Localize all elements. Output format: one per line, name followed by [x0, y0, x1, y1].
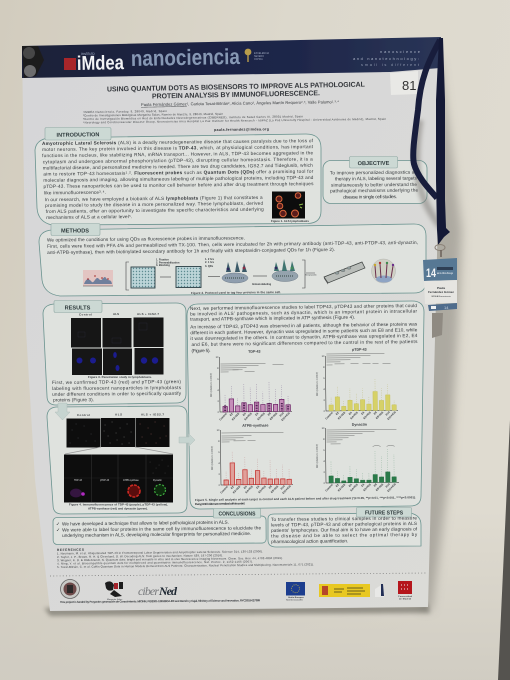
logo: imdea wordmark: iMdea [77, 52, 125, 75]
chart: Dynactin: E6 [360, 482, 366, 488]
objective text [330, 170, 421, 200]
chart: ATPB-synthase: 6 [218, 451, 220, 454]
lower micrograph block: ATPB-synthase [123, 479, 140, 482]
top micrographs [66, 418, 170, 448]
chart: ATPB-synthase: E6+IGS [257, 484, 267, 494]
results text 2: be involved in ALS' pathogenesis, such as dynactin, which is an important protein in intracellular [190, 309, 418, 316]
chart: ATPB-synthase: MFI (relative to control) [211, 446, 214, 470]
heading: results: RESULTS [65, 306, 91, 312]
affiliations: ²Centro de Investigaciones Biológicas Margarita Salas, Ramiro de Maeztu, 9, 28040, Madrid, Spain [83, 112, 223, 117]
chart: ATPB-synthase [210, 423, 293, 496]
chart: Dynactin: 6 [323, 449, 325, 452]
banner tagline [353, 49, 421, 67]
introduction text: multifactorial disease, and personalized medicine is needed. There are two drug candidates, IGS2.7 and Tideglusib, which [43, 163, 313, 170]
introduction text: like immunofluorescence³˒⁴. [44, 190, 106, 195]
chart: pTDP-43: 6 [323, 377, 325, 380]
chart: Dynactin: 8 [323, 438, 325, 441]
logo: Comunidad de Madrid: Comunidad [398, 596, 413, 598]
panel: results left bottom [47, 406, 187, 514]
name badge: workshop [436, 271, 453, 275]
column labels: Control [79, 312, 92, 316]
email: paula.fernandez@imdea.org [214, 127, 269, 132]
banner tagline: nanoscience [380, 49, 421, 54]
chart: ATPB-synthase: E8+IGS [270, 484, 279, 494]
name badge: 14 [444, 305, 449, 310]
caption figure 4: Figure 4. Immunofluorescence of TDP-43 (purple), pTDP-43 (yellow), [69, 502, 168, 506]
panel: introduction [35, 128, 321, 225]
logo: EU flag: NextGenerationEU [286, 598, 303, 602]
logo: ciberNed [138, 584, 178, 598]
conclusions text: underlying mechanism in ALS, developing molecular fingerprints for personalized medicine. [62, 531, 251, 538]
conclusions text: ✓ [56, 527, 60, 533]
logo: ciberNed: Ned [158, 584, 178, 598]
chart: ATPB-synthase: E4+IGS [244, 484, 254, 494]
chart: pTDP-43: pTDP-43 [352, 348, 367, 352]
heading: introduction [45, 128, 111, 140]
chart: ATPB-synthase: E10 [280, 484, 286, 490]
heading: introduction: INTRODUCTION [57, 132, 99, 139]
number card 81: 81 [402, 78, 416, 93]
step list 2: 3. QDs [205, 264, 214, 268]
arrow: down between result panels [55, 403, 70, 420]
step list 2: 1. 2 hrs [205, 257, 215, 261]
references: 1. Neumann, M. et al. Ubiquitinated TDP-43 in Frontotemporal Lobar Degeneration and Amyotrophic Lateral Sclerosis. Science 314, 130-133 (2006). [57, 549, 263, 555]
lanyard shadow [417, 120, 443, 338]
figure 1: ALS lymphoblasts: Figure 1. ALS lymphoblasts [271, 219, 309, 223]
arrow with label: Immunolabeling [252, 283, 272, 286]
chart: Dynactin: E10 [385, 482, 391, 488]
arrow with label [252, 276, 272, 286]
introduction text: promising model to study the disease in a more personalized way. These lymphoblasts, derived [45, 201, 264, 208]
slide with antibodies 1 [222, 261, 248, 283]
step list 2: 2. 1 hrs [205, 260, 215, 264]
chart: TDP-43: E4 [242, 411, 247, 417]
chart: ATPB-synthase: E6 [255, 484, 261, 490]
chart: ATPB-synthase: E8 [268, 484, 273, 490]
lanyard [413, 38, 450, 245]
chart: TDP-43: E10+IGS [280, 411, 291, 422]
figure 4: immunofluorescence [64, 412, 173, 510]
affiliations: ¹IMDEA Nanociencia, Faraday, 9, 28049, Madrid, Spain [83, 109, 167, 114]
arrow [160, 276, 171, 278]
introduction text: motor neurons. The key protein involved in this disease is TDP-43, which, at physiological conditions, has important [42, 144, 314, 152]
column labels: ALS + IGS2.7 [141, 412, 164, 416]
chart: ATPB-synthase: 4 [218, 462, 220, 465]
lower micrograph block [64, 454, 173, 502]
chart: Dynactin: 4 [323, 460, 325, 463]
arrow [208, 276, 220, 278]
chart: pTDP-43: E8 [373, 410, 378, 416]
panel: conclusions [53, 508, 266, 544]
chart: pTDP-43: E10 [385, 410, 391, 416]
conclusions text [56, 519, 262, 538]
results text 1 [52, 379, 182, 402]
chart: TDP-43: E4+IGS [243, 411, 253, 421]
chart: ATPB-synthase: E2+IGS [232, 485, 241, 494]
chart: TDP-43: 10 [216, 356, 219, 359]
chart: TDP-43: E10 [279, 411, 285, 417]
affiliations [83, 106, 387, 124]
future steps text: the disease and be able to select the optimal therapy by [271, 532, 418, 538]
references: 3. Wegner, K. D. & Hildebrandt, N. Quantum dots: bright and versatile in vitro and in vivo fluorescence imaging biosensors. Chem. Soc. Rev. 44, 4792-4834 (2015). [57, 556, 283, 562]
chart: ATPB-synthase: 8 [218, 440, 220, 443]
references: REFERENCES [57, 548, 84, 552]
logo row [60, 580, 413, 602]
chart: Dynactin: E4 [348, 482, 353, 488]
chart: TDP-43: E8 [267, 411, 272, 417]
chart: TDP-43: E6 [254, 411, 260, 417]
heading: objective: OBJECTIVE [358, 161, 390, 167]
chart: Dynactin: Dynactin [352, 423, 367, 427]
results text 1: proteins (Figure 3). [53, 397, 94, 402]
badge clip [435, 244, 445, 257]
funding note: This project is funded by Proyectos generación de Conocimiento. MICINN, PID2021-126539OA-I00 and Ramón y Cajal, Ministry of Science and Innovation, RYC2018-027389 [60, 598, 260, 604]
chart: ATPB-synthase: 2 [218, 473, 221, 476]
results text 1: labeling with fluorescent nanoparticles in lymphoblasts [52, 385, 182, 391]
logo: CIB [105, 581, 123, 601]
results text 2: it was downregulated in the others. In contrast to dynactin, ATPB-synthase was upregulated in E2, E4 [190, 333, 418, 341]
chart: Dynactin: E2 [335, 482, 340, 488]
chart: Dynactin: Control [324, 483, 334, 492]
future steps text: levels of TDP-43, pTDP-43 and other pathological proteins in ALS [271, 521, 417, 527]
chart: ATPB-synthase: E10+IGS [281, 484, 292, 495]
well plate 1 [131, 267, 155, 288]
column labels: ALS [115, 412, 122, 416]
introduction text [42, 138, 314, 220]
references: 2. Taylor, J. P., Brown, R. H. & Cleveland, D. W. Decoding ALS: from genes to mechanism. Nature 539, 197-206 (2016). [57, 553, 223, 559]
chart: Dynactin: E8+IGS [375, 482, 384, 492]
heading: methods [51, 224, 100, 236]
future steps text: patients' lymphocytes. Our final aim is to have an early diagnosis of [271, 526, 418, 533]
left bracket [126, 262, 129, 290]
chart: Dynactin: E6+IGS [362, 482, 372, 492]
methods text: anti-ATPB-synthase), then with biotinylated secondary antibody for 1h and finally with streptavidin-conjugated QDs for 1h (Figure 2). [47, 247, 335, 255]
step list 1: 1. Fixation [156, 258, 169, 262]
introduction text: pTDP-43. These nanoparticles can be used to monitor cell behavior before and after drug treatment through techniques [43, 181, 314, 189]
chart: Dynactin: 10 [322, 427, 325, 430]
chart: pTDP-43: 4 [323, 388, 325, 391]
chart: pTDP-43: E4 [348, 410, 353, 416]
chart: pTDP-43: Control [324, 411, 334, 420]
introduction text: aim to restore TDP-43 homeostasis¹˒². Fluorescent probes such as Quantum Dots (QDs) offer a promising tool for [43, 169, 314, 177]
column labels [77, 412, 164, 417]
chart: ATPB-synthase: Control [219, 485, 229, 494]
introduction text: from ALS patients, offer an opportunity to investigate the specific characteristics and underlying [46, 207, 264, 214]
methods text: We optimized the conditions for using QDs as fluorescence probes in immunofluorescence. [47, 235, 245, 242]
panel: objective [323, 156, 427, 204]
results text 2: different in each patient. However, dynactin was upregulated in some patients such as E8 and E10, while [190, 327, 418, 335]
icon: dotted nanoparticle image [22, 46, 44, 78]
chart: TDP-43: 4 [217, 389, 219, 392]
caption figure 4: ATPB-synthase (red) and dynactin (green). [88, 506, 148, 510]
poster shadow on wall [44, 60, 462, 616]
chart: TDP-43: MFI (relative to control) [210, 373, 213, 397]
results text 2 [190, 303, 418, 353]
name badge: IMDEA Nanociencia [431, 295, 452, 298]
zoom funnel lines [65, 447, 173, 454]
objective text: pathological mechanisms underlying the [330, 188, 418, 193]
chart: Dynactin [315, 422, 399, 494]
chart: pTDP-43: 2 [323, 399, 326, 402]
microscope slide [324, 262, 365, 284]
logo: agency mark [375, 584, 384, 597]
chart: pTDP-43: E2+IGS [337, 411, 346, 420]
logo: nanociencia wordmark: nanociencia [131, 44, 241, 71]
results text 2: An increase of TDP43, pTDP43 was observed in all patients, although the behavior of these proteins was [190, 322, 418, 329]
methods text: First, cells were fixed with PFA 4% and permeabilized with TX-100. Then, cells were incubated for 2h with primary antibody (anti-TDP-43, anti-PTDP-43, anti-dynactin, [47, 240, 418, 249]
logo: ciberNed: ciber [138, 584, 159, 598]
chart: pTDP-43: 8 [323, 366, 325, 369]
lower micrograph block: Dynactin [153, 479, 163, 482]
logo: Madrid red square [64, 58, 76, 70]
objective text: disease in single cell studies. [343, 194, 397, 200]
chart: ATPB-synthase: E4 [243, 484, 248, 490]
caption figure 4 [69, 502, 168, 510]
chart: pTDP-43: MFI (relative to control) [316, 372, 319, 396]
column labels: ALS [113, 312, 119, 316]
panel: results right [187, 301, 424, 509]
chart: Dynactin: E10+IGS [386, 482, 397, 493]
references: 4. Ning, Y. et al. Biocompatible quantum dots for multiplexed and quantitative immunofluorescence. Nat. Protoc. 2, 1152-1165 (2007). [57, 560, 253, 566]
caption figure 2: Figure 2. Protocol used to tag four proteins in the same cell. [191, 290, 281, 295]
label: streptavidin step [305, 273, 317, 276]
number card 81 [390, 71, 418, 95]
chart: pTDP-43 [315, 347, 398, 422]
caption figure 5: Every protein data was normalized with its control. [195, 501, 245, 506]
step list 1: 3. Blocking [156, 263, 170, 267]
logo: Severo Ochoa [245, 49, 270, 62]
figure 2: protocol diagram [83, 257, 396, 295]
chart: TDP-43: E2 [229, 411, 234, 417]
objective text: To improve personalized diagnostics and [330, 170, 420, 175]
panel: results left top [43, 300, 186, 405]
chart: TDP-43: 0 [218, 411, 220, 414]
chart: ATPB-synthase: E2 [230, 484, 235, 490]
chart: TDP-43: 2 [217, 400, 220, 403]
micrograph grid [71, 318, 164, 375]
logo: Severo Ochoa: SEVERO [254, 55, 264, 58]
chart: pTDP-43: E10+IGS [386, 410, 397, 421]
right bracket [302, 260, 305, 288]
logo: imdea wordmark: instituto [81, 51, 96, 56]
name badge [423, 258, 457, 311]
heading: results [54, 300, 102, 312]
name badge: Paula [437, 286, 445, 290]
logo: EU flag: Unión Europea [288, 597, 304, 599]
well plate 2 [176, 266, 201, 288]
column labels: Control [77, 413, 90, 417]
heading: future steps [356, 508, 412, 517]
chart: pTDP-43: E6+IGS [362, 410, 372, 420]
methods text [47, 234, 418, 255]
chart: Dynactin: 2 [323, 471, 326, 474]
banner tagline: small is different [361, 62, 420, 67]
objective text: therapy in ALS, labeling several targets [335, 176, 418, 181]
heading: future steps: FUTURE STEPS [365, 510, 404, 516]
objective text: simultaneously to better understand the [331, 182, 417, 188]
caption figure 5: Figure 5. Single cell analysis of each target in control and each ALS patient before and after drug treatment (*p<0.05, **p<0.01, ***p<0.001, ****p<0.0001). [195, 495, 416, 502]
conclusions text: We were able to label four proteins in the same cell by immunofluorescence to elucidate the [62, 525, 261, 532]
heading: conclusions [214, 508, 260, 518]
chart: TDP-43 [209, 349, 292, 423]
name badge: Fernández Gómez [428, 290, 454, 294]
panel: future steps [268, 508, 421, 547]
results text 1: under different conditions in order to specifically quantify [52, 391, 182, 397]
chart: Dynactin: E4+IGS [349, 482, 359, 492]
chart: TDP-43: TDP-43 [248, 350, 261, 354]
logo: Spanish government [319, 584, 370, 597]
results text 2: transport, and ATPB-synthase which is implicated in ATP synthesis (Figure 4). [190, 315, 355, 322]
panel: methods [39, 224, 426, 296]
lower micrograph block: TDP-43 [74, 480, 83, 482]
cell dish [83, 270, 113, 286]
results text 2: Next, we performed immunofluorescence studies to label TDP43, pTDP43 and other proteins that could [190, 303, 417, 311]
label: streptavidin step: Streptavidin [305, 274, 317, 276]
heading: conclusions: CONCLUSIONS [219, 512, 256, 518]
authors: Paula Fernández Gómez¹, Carlota Tosat-Bitrián², Alicia Cano³, Ángeles Martín Requero²˒³, Valle Palomo¹˒³˒* [141, 99, 339, 107]
references [57, 545, 314, 569]
logo: Severo Ochoa: OCHOA [254, 58, 263, 61]
arrow: right between panels [179, 434, 195, 446]
chart: ATPB-synthase: ATPB-synthase [242, 424, 269, 428]
chart: ATPB-synthase: 10 [217, 429, 220, 432]
magnified proteins circle [372, 259, 396, 283]
chart: pTDP-43: E8+IGS [375, 410, 384, 420]
results text 1: First, we confirmed TDP-43 (red) and pTDP-43 (green) [52, 379, 181, 385]
lower micrograph block: pTDP-43 [100, 480, 110, 482]
introduction text: Amyotrophic Lateral Sclerosis (ALS) is a deadly neurodegenerative disease that causes paralysis due to the loss of [42, 138, 314, 146]
chart: Dynactin: E8 [373, 482, 378, 488]
caption figure 5 [195, 495, 416, 506]
chart: TDP-43: E2+IGS [231, 412, 240, 421]
chart: Dynactin: 0 [324, 482, 326, 485]
chart: ATPB-synthase: 0 [219, 484, 221, 487]
step list 1 [156, 258, 180, 267]
title [107, 82, 366, 100]
chart: Dynactin: MFI (relative to control) [316, 444, 319, 468]
chart: pTDP-43: 0 [324, 410, 326, 413]
heading: methods: METHODS [61, 228, 89, 234]
logo: CIB: Margarita Salas [107, 598, 123, 601]
step list 1: 2. Permeabilization [156, 260, 180, 264]
title: PROTEIN ANALYSIS BY IMMUNOFLUORESCENCE. [152, 90, 320, 100]
introduction text: functions in the nucleus, like stabilizing RNA, mRNA transport... However, in ALS, TDP-43 becomes aggregated in the [42, 150, 314, 158]
header banner [22, 37, 441, 78]
introduction text: cytoplasm and undergoes abnormal phosphorylation (pTDP-43), disrupting cellular homeostasis. Therefore, it is a [43, 157, 313, 164]
chart: pTDP-43: E2 [335, 410, 340, 416]
chart: TDP-43: E8+IGS [269, 411, 278, 421]
results text 2: (Figure 5). [192, 348, 211, 353]
introduction text: In our research, we have employed a biobank of ALS lymphoblasts (Figure 1) that constitutes a [45, 195, 263, 202]
logo: Comunidad de Madrid: de Madrid [399, 598, 412, 600]
references: 5. Toval-Bitrián, C. et al. Coffin Quantum Dots in Human Models Derived from ALS Patients: Characterization, Nuclear Penetration Studies and Multiplexing. Nanomaterials 11, 671 (2021). [57, 562, 314, 569]
future steps text: pharmacological action quantification. [271, 538, 348, 544]
column labels [79, 312, 159, 316]
column labels: ALS + IGS2.7 [137, 312, 159, 316]
logo: university seal [60, 580, 80, 598]
step list 2 [205, 257, 215, 268]
poster sheet [22, 37, 441, 611]
chart: TDP-43: 8 [217, 367, 219, 370]
introduction text: mechanisms of ALS at a cellular level⁵. [46, 214, 132, 220]
slide with antibodies 2 [272, 259, 298, 282]
chart: pTDP-43: E6 [360, 410, 366, 416]
introduction text: molecular diagnosis and imaging, allowing simultaneous labeling of multiple pathological proteins, including TDP-43 and [43, 175, 314, 183]
chart: TDP-43: Control [218, 412, 228, 421]
chart: pTDP-43: E4+IGS [349, 410, 359, 420]
conclusions text: ✓ [56, 521, 60, 527]
chart: pTDP-43: 10 [322, 355, 325, 358]
chart: TDP-43: 6 [217, 378, 219, 381]
logo: EU flag [286, 582, 305, 602]
chart: Dynactin: E2+IGS [337, 483, 346, 492]
chart: TDP-43: E6+IGS [256, 411, 266, 421]
affiliations: ³Centro de Investigación Biomédica en Red de Enfermedades Neurodegenerativas (CIBERNED), Instituto de Salud Carlos III, 28031 Madrid, Spain [83, 114, 304, 121]
figure 3: penetration study [71, 312, 164, 379]
logo: Comunidad de Madrid [398, 581, 413, 600]
banner tagline: and nanotechnology: [353, 56, 419, 61]
figure 1: ALS lymphoblasts [271, 192, 309, 223]
future steps text: To transfer these studies to clinical samples in order to measure [271, 515, 417, 522]
affiliations: ⁴Neurology and Cerebrovascular Disease Group, Neurociencias Area Hospital La Paz Institute for Health Research - IdiPAZ (La Paz University Hospital - Universidad Autónoma de Madrid), Madrid, Spain [83, 117, 387, 124]
caption figure 3: Figure 3. Penetration study in lymphoblasts. [88, 375, 152, 379]
logo: Severo Ochoa: EXCELENCIA [254, 52, 270, 55]
results text 2: and E6, but there were no significant differences compared to the control in the rest of the patients [191, 339, 418, 347]
title: USING QUANTUM DOTS AS BIOSENSORS TO IMPROVE ALS PATHOLOGICAL [107, 82, 366, 93]
conclusions text: We have developed a technique that allows to label pathological proteins in ALS. [62, 520, 229, 526]
name badge: 14 [426, 266, 436, 280]
future steps text [271, 515, 418, 544]
